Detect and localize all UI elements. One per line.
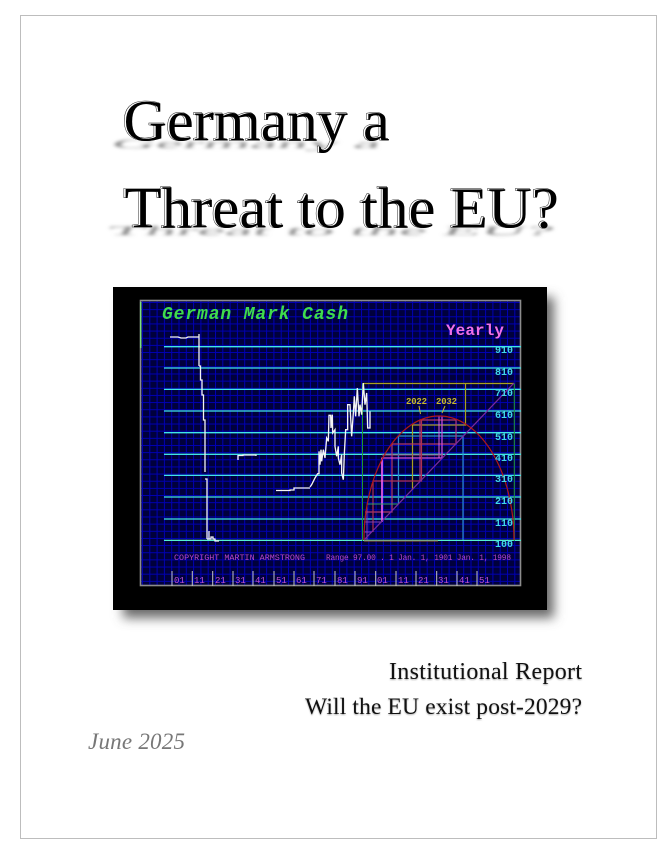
time axis ticks and decade labels: 21: [418, 576, 429, 586]
title line 1: Germany a: Germany a: [122, 88, 388, 153]
horizontal price levels: [164, 347, 521, 540]
copyright and range line: [174, 553, 511, 563]
copyright and range line: COPYRIGHT MARTIN ARMSTRONG: [174, 553, 305, 563]
cycle year labels 2022 and 2032: [406, 397, 457, 414]
price axis labels: 810: [495, 368, 513, 379]
price axis labels: 510: [495, 433, 513, 444]
subtitle: Institutional Report: Institutional Report: [389, 660, 582, 686]
yearly label: Yearly: [446, 322, 504, 340]
time axis ticks and decade labels: 01: [377, 576, 388, 586]
time axis ticks and decade labels: 01: [174, 576, 185, 586]
subtitle: Institutional Report: Institutional Report: [389, 659, 582, 685]
copyright and range line: Range 97.00 . 1 Jan. 1, 1901 Jan. 1, 1998: [326, 555, 511, 563]
chart image: German Mark Cash yearly: [113, 287, 554, 618]
time axis ticks and decade labels: 21: [215, 576, 226, 586]
title line 2: Threat to the EU?: Threat to the EU?: [123, 175, 557, 240]
title line 1: Germany a: Germany a: [124, 89, 390, 153]
title line 2: Threat to the EU?: Threat to the EU?: [103, 224, 559, 238]
price axis labels: 710: [495, 389, 513, 400]
title line 1: Germany a: Germany a: [108, 137, 386, 151]
time axis ticks and decade labels: 31: [235, 576, 246, 586]
plot area with grid: [140, 300, 520, 586]
time axis ticks and decade labels: 81: [337, 576, 348, 586]
date: June 2025: June 2025: [88, 729, 185, 754]
title line 1: Germany a: Germany a: [122, 88, 388, 153]
price axis labels: 310: [495, 475, 513, 486]
time axis ticks and decade labels: 31: [438, 576, 449, 586]
time axis ticks and decade labels: 51: [479, 576, 490, 586]
time axis ticks and decade labels: 11: [398, 576, 409, 586]
chart title: German Mark Cash: [162, 305, 348, 325]
price axis labels: 210: [495, 497, 513, 508]
cycle year labels 2022 and 2032: 2032: [436, 397, 457, 407]
gann squares and arc: [362, 383, 514, 541]
time axis ticks and decade labels: [172, 571, 490, 586]
price axis labels: 410: [495, 454, 513, 465]
time axis ticks and decade labels: 41: [255, 576, 266, 586]
title line 2: Threat to the EU?: Threat to the EU?: [123, 175, 557, 240]
time axis ticks and decade labels: 11: [194, 576, 205, 586]
time axis ticks and decade labels: 91: [357, 576, 368, 586]
price axis labels: 910: [495, 346, 513, 357]
time axis ticks and decade labels: 41: [459, 576, 470, 586]
price axis labels: 110: [495, 519, 513, 530]
price axis labels: 610: [495, 411, 513, 422]
cycle year labels 2022 and 2032: 2022: [406, 397, 427, 407]
title: [103, 88, 559, 240]
title line 2: Threat to the EU?: Threat to the EU?: [124, 176, 559, 240]
price line: [170, 334, 370, 541]
price axis labels: [495, 346, 513, 551]
time axis ticks and decade labels: 71: [316, 576, 327, 586]
time axis ticks and decade labels: 51: [276, 576, 287, 586]
subtitle: Will the EU exist post-2029?: Will the EU exist post-2029?: [305, 695, 582, 721]
time axis ticks and decade labels: 61: [296, 576, 307, 586]
subtitle: Will the EU exist post-2029?: Will the EU exist post-2029?: [305, 694, 582, 720]
price axis labels: 100: [495, 540, 513, 551]
